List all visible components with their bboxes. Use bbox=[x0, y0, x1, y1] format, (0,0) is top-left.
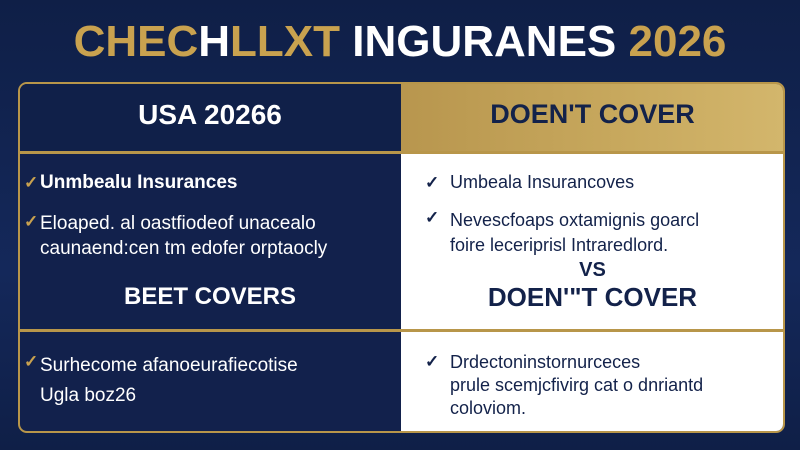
left subheading: BEET COVERS bbox=[124, 283, 296, 310]
text: ✓ bbox=[425, 173, 439, 192]
text: Drdectoninstornurceces bbox=[450, 352, 640, 372]
right column row 2 bbox=[425, 352, 703, 418]
vs label: VS bbox=[579, 259, 606, 281]
text: Ugla boz26 bbox=[40, 385, 136, 406]
left column row 1 bbox=[24, 172, 328, 259]
text: Eloaped. al oastfiodeof unacealo bbox=[40, 213, 316, 234]
right body white bbox=[401, 154, 783, 431]
header: right gold bbox=[401, 84, 783, 151]
text: ✓ bbox=[425, 208, 439, 227]
right subheading: DOEN'"T COVER bbox=[488, 282, 697, 312]
text: ✓ bbox=[24, 173, 38, 192]
text: Unmbealu Insurances bbox=[40, 172, 237, 193]
text: Nevescfoaps oxtamignis goarcl bbox=[450, 210, 699, 230]
text: Surhecome afanoeurafiecotise bbox=[40, 355, 298, 376]
text: foire leceriprisl Intraredlord. bbox=[450, 235, 668, 255]
header: left bbox=[20, 84, 401, 151]
text: ✓ bbox=[24, 352, 38, 371]
text: coloviom. bbox=[450, 398, 526, 418]
text: Umbeala Insurancoves bbox=[450, 172, 634, 192]
text: ✓ bbox=[425, 352, 439, 371]
header text left: USA 20266 bbox=[138, 99, 282, 130]
text: caunaend:cen tm edofer orptaocly bbox=[40, 238, 327, 259]
table frame bbox=[18, 82, 785, 433]
left column row 2 bbox=[24, 352, 298, 406]
text: ✓ bbox=[24, 212, 38, 231]
header text right: DOEN'T COVER bbox=[490, 99, 695, 129]
right column row 1 bbox=[425, 172, 699, 255]
title: CHECHLLXT INGURANES 2026 bbox=[74, 17, 726, 66]
text: prule scemjcfivirg cat o dnriantd bbox=[450, 375, 703, 395]
